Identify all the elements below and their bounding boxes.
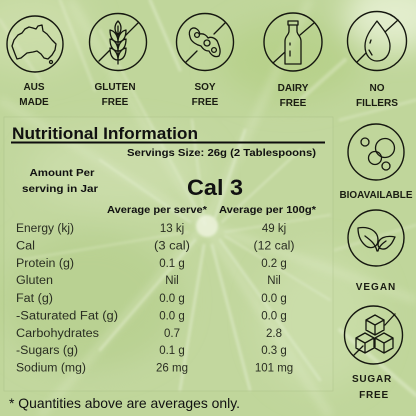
nutrition table rows: (12 cal) — [254, 240, 295, 252]
label: gluten free: FREE — [102, 97, 129, 108]
icon: gluten free — [90, 14, 146, 70]
label: soy free: SOY — [194, 82, 216, 93]
label: sugar free: FREE — [359, 390, 389, 401]
nutrition table rows: 0.0 g — [159, 293, 185, 305]
label: gluten free: GLUTEN — [94, 82, 136, 93]
nutrition table rows: -Sugars (g) — [16, 345, 78, 357]
panel: nutrition table backdrop — [4, 117, 333, 391]
icon: vegan — [348, 210, 404, 266]
label: dairy free: FREE — [280, 98, 307, 109]
nutrition table rows: Cal — [16, 240, 35, 252]
nutrition table rows: 101 mg — [255, 362, 293, 374]
label: no fillers: NO — [370, 83, 385, 94]
label: sugar free: SUGAR — [352, 374, 392, 385]
nutrition table rows: Nil — [267, 275, 281, 287]
nutrition table rows: 0.7 — [164, 328, 180, 340]
calories headline: Cal 3 — [187, 175, 243, 200]
servings size: Servings Size: 26g (2 Tablespoons) — [127, 147, 316, 159]
nutrition table rows: 0.0 g — [261, 310, 287, 322]
column headers: Average per serve* — [107, 204, 208, 216]
nutrition table rows: 0.3 g — [261, 345, 287, 357]
amount per serving: serving in Jar — [22, 183, 98, 195]
nutrition table rows: 2.8 — [266, 328, 282, 340]
column headers: Average per 100g* — [219, 204, 317, 216]
label: aus made: AUS — [23, 82, 45, 93]
nutrition table rows: 49 kj — [262, 223, 286, 235]
icon: soy free — [176, 14, 234, 70]
nutrition table rows: 0.1 g — [159, 258, 185, 270]
nutrition table rows: 0.0 g — [261, 293, 287, 305]
icon: aus made — [7, 16, 63, 72]
label: aus made: MADE — [19, 97, 49, 108]
nutrition table rows: (3 cal) — [154, 240, 190, 252]
icon: sugar free — [344, 306, 402, 364]
nutrition table rows: Protein (g) — [16, 258, 74, 270]
label: no fillers: FILLERS — [356, 98, 398, 109]
label: dairy free: DAIRY — [278, 83, 309, 94]
nutrition table rows: 13 kj — [160, 223, 184, 235]
footnote: * Quantities above are averages only. — [9, 395, 240, 411]
nutrition table rows: Sodium (mg) — [16, 362, 86, 374]
nutrition table rows: 0.1 g — [159, 345, 185, 357]
nutrition table rows: 0.0 g — [159, 310, 185, 322]
nutrition table rows: Gluten — [16, 275, 53, 287]
label: vegan: VEGAN — [356, 282, 396, 293]
column headers — [107, 204, 317, 216]
nutrition table rows: -Saturated Fat (g) — [16, 310, 118, 322]
nutrition table rows: Nil — [165, 275, 179, 287]
nutrition table rows: 26 mg — [156, 362, 188, 374]
nutrition table rows: Carbohydrates — [16, 328, 99, 340]
nutrition table rows: Fat (g) — [16, 293, 53, 305]
icon: no fillers — [348, 12, 406, 70]
amount per serving: Amount Per — [30, 167, 94, 179]
divider rule — [11, 142, 325, 144]
label: bioavailable: BIOAVAILABLE — [340, 190, 413, 201]
nutrition table rows: Energy (kj) — [16, 223, 74, 235]
icon: dairy free — [264, 13, 322, 71]
nutrition table rows: 0.2 g — [261, 258, 287, 270]
nutrition table rows — [16, 223, 295, 374]
heading: nutritional information: Nutritional Information — [12, 124, 198, 143]
icon: bioavailable — [348, 124, 404, 180]
label: soy free: FREE — [192, 97, 219, 108]
